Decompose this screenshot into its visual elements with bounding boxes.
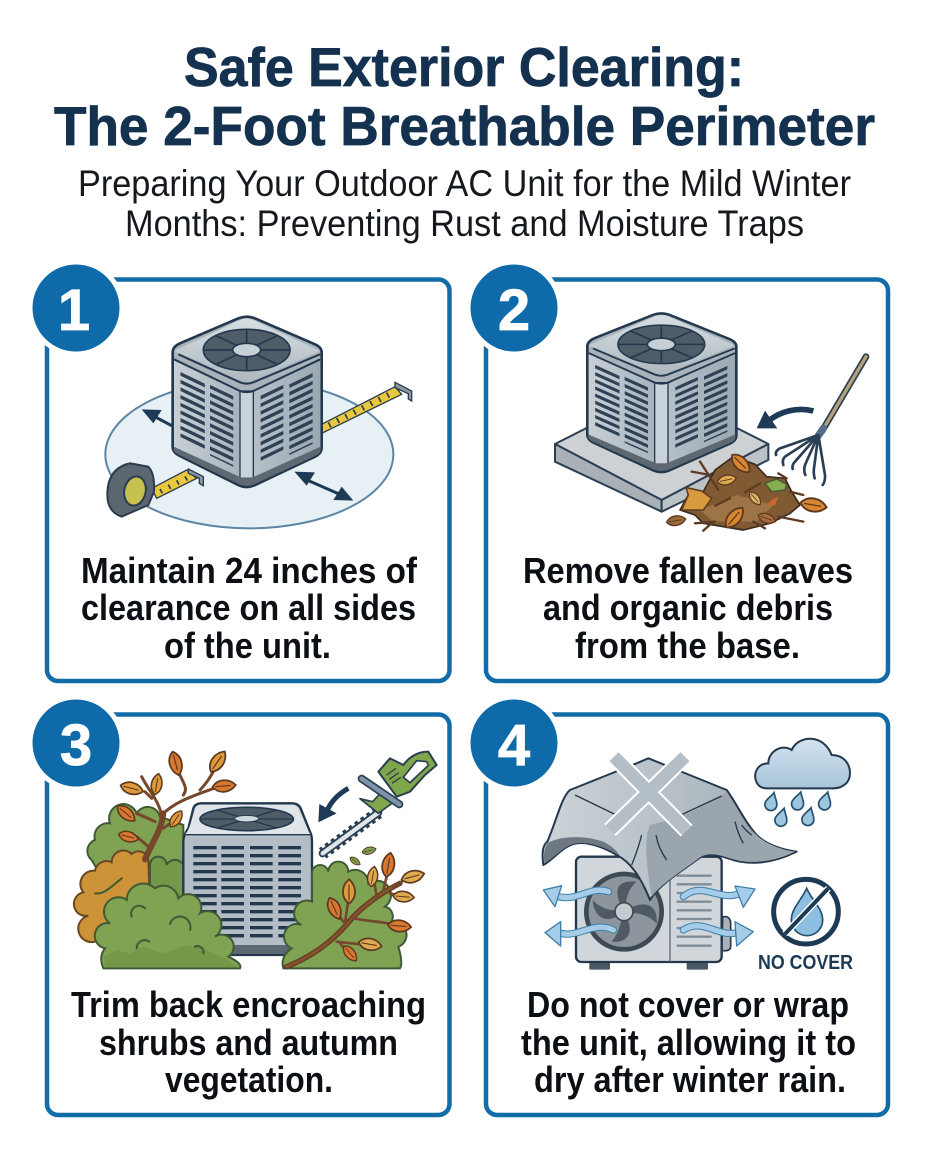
concrete slab xyxy=(555,390,768,512)
arrow: trim direction xyxy=(318,788,348,822)
badge 2 xyxy=(468,262,560,354)
leaf debris pile xyxy=(666,451,828,531)
panel 2: debris xyxy=(468,262,888,681)
subtitle xyxy=(78,163,851,244)
rain cloud xyxy=(755,739,850,828)
arrow: sweep to rake xyxy=(757,409,813,428)
right shrub xyxy=(283,862,407,968)
caption 2 xyxy=(523,550,853,666)
orange shrub xyxy=(74,850,150,942)
badge 3 xyxy=(30,697,122,789)
badge 1: 1 xyxy=(58,278,90,343)
left branch with autumn leaves xyxy=(114,748,236,859)
badge 1 xyxy=(30,262,122,354)
illustration: unit on slab with debris and rake xyxy=(555,313,866,531)
AC unit front view xyxy=(183,803,312,955)
arrow: front right clearance xyxy=(294,472,353,501)
tape blade right xyxy=(322,382,412,433)
illustration: unit with measured perimeter xyxy=(105,317,412,528)
caption 3: shrubs and autumn xyxy=(99,1022,398,1063)
AC unit xyxy=(173,317,322,487)
badge 3: 3 xyxy=(60,713,92,778)
caption 1: of the unit. xyxy=(164,625,331,666)
subtitle: Months: Preventing Rust and Moisture Traps xyxy=(125,203,804,244)
caption 1: clearance on all sides xyxy=(81,587,416,628)
caption 4 xyxy=(521,984,856,1100)
caption 2: from the base. xyxy=(575,625,800,666)
badge 4 xyxy=(468,697,560,789)
caption 4: Do not cover or wrap xyxy=(527,984,849,1025)
panel 2 border xyxy=(486,280,888,681)
panel 4: do not cover xyxy=(468,697,888,1115)
title xyxy=(54,36,875,157)
falling green leaves xyxy=(348,845,377,867)
caption 1 xyxy=(81,550,418,666)
caption 3 xyxy=(71,984,426,1100)
illustration: unit with shrubs and trimmer xyxy=(74,748,437,968)
caption 3: Trim back encroaching xyxy=(71,984,426,1025)
caption 2: Remove fallen leaves xyxy=(523,550,853,591)
title: The 2-Foot Breathable Perimeter xyxy=(54,95,875,157)
subtitle: Preparing Your Outdoor AC Unit for the Mild Winter xyxy=(78,163,851,204)
right branch with autumn leaves xyxy=(287,852,426,967)
caption 4: the unit, allowing it to xyxy=(521,1022,856,1063)
caption 1: Maintain 24 inches of xyxy=(81,550,418,591)
no water icon xyxy=(774,879,838,944)
panel 3 border xyxy=(47,714,450,1115)
back green shrub xyxy=(87,804,183,880)
hedge trimmer xyxy=(323,752,437,853)
clearance perimeter ellipse xyxy=(105,380,393,528)
X mark xyxy=(610,757,687,831)
AC unit xyxy=(587,313,736,472)
cover tarp xyxy=(543,758,797,900)
middle green shrub xyxy=(150,857,184,907)
caption 2: and organic debris xyxy=(543,587,833,628)
rake xyxy=(776,357,866,485)
panel 4 border xyxy=(486,714,888,1115)
badge 4: 4 xyxy=(498,713,530,778)
tape measure xyxy=(107,463,203,517)
caption 4: dry after winter rain. xyxy=(534,1059,846,1100)
caption 3: vegetation. xyxy=(165,1059,333,1100)
panel 1: clearance xyxy=(30,262,450,681)
panel 3: vegetation xyxy=(30,697,450,1115)
front shrub xyxy=(95,878,240,968)
no cover label: NO COVER xyxy=(758,952,853,974)
title: Safe Exterior Clearing: xyxy=(184,36,744,98)
panel 1 border xyxy=(47,280,450,681)
arrow: back left clearance xyxy=(142,409,172,426)
outdoor unit with fan xyxy=(576,857,731,970)
illustration: covered unit and rain xyxy=(543,739,850,970)
badge 2: 2 xyxy=(498,278,530,343)
airflow arrows xyxy=(543,886,755,946)
